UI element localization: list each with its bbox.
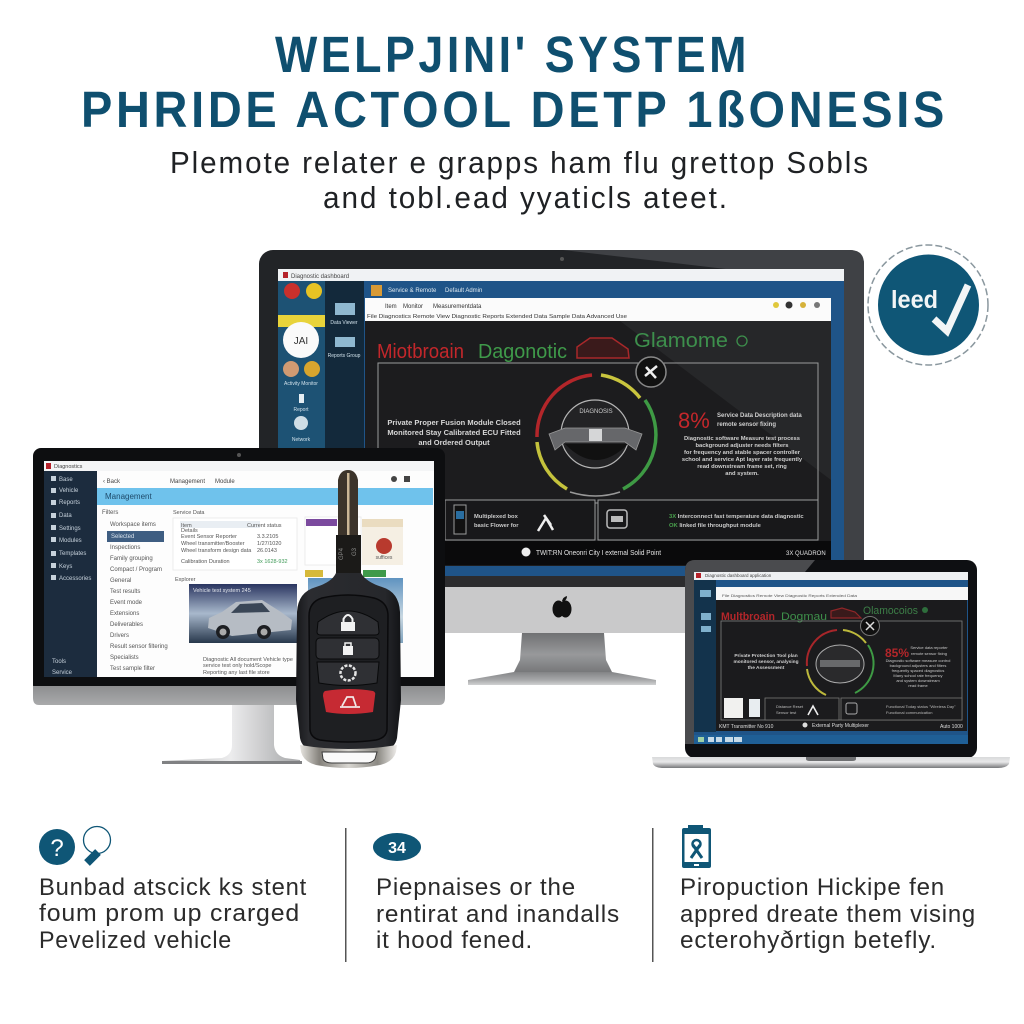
text block: Piropuction Hickipe fen bbox=[680, 874, 945, 901]
data table: Wheel transmitter/Booster bbox=[181, 541, 245, 547]
navigation sidebar: Modules bbox=[59, 538, 82, 544]
icon: question circle bbox=[39, 829, 75, 865]
data table: 26.0143 bbox=[257, 548, 277, 554]
data table: Calibration Duration bbox=[181, 559, 230, 565]
stat 8%: background adjuster needs filters bbox=[695, 443, 789, 449]
article text: Diagnostic All document Vehicle type bbox=[203, 657, 293, 663]
left note: Monitored Stay Calibrated ECU Fitted bbox=[387, 428, 521, 437]
laptop stat: frequently spaced diagnostics bbox=[892, 668, 944, 673]
list panel bbox=[102, 510, 168, 672]
button: unlock bbox=[316, 638, 379, 659]
text block: it hood fened. bbox=[376, 927, 533, 954]
list panel: Drivers bbox=[110, 633, 129, 639]
left note: Private Proper Fusion Module Closed bbox=[387, 418, 521, 427]
laptop sub panels: Functional communication bbox=[886, 710, 932, 715]
laptop stat: remote sensor fixing bbox=[911, 651, 947, 656]
divider bbox=[345, 828, 346, 962]
navigation sidebar: Settings bbox=[59, 526, 81, 532]
text block: foum prom up crarged bbox=[39, 900, 300, 927]
laptop sub panels: Functional Today status "Wireless Day" bbox=[886, 704, 956, 709]
divider bbox=[652, 828, 654, 962]
monitor body bbox=[33, 448, 445, 705]
list panel: Extensions bbox=[110, 611, 139, 617]
text block bbox=[680, 874, 976, 954]
button: panic bbox=[323, 689, 375, 714]
large monitor bbox=[259, 250, 864, 685]
status strip: 3X QUADRON bbox=[786, 551, 826, 557]
product cards bbox=[305, 517, 403, 643]
text block bbox=[39, 874, 307, 954]
navigation sidebar: Tools bbox=[52, 659, 66, 665]
data table: Service Data bbox=[173, 510, 205, 516]
stat 8%: Diagnostic software Measure test process bbox=[684, 436, 800, 442]
laptop stat: and system downstream bbox=[896, 678, 940, 683]
vehicle photo: Explorer bbox=[175, 577, 196, 583]
dark dashboard panel: Glamome bbox=[634, 330, 728, 352]
article text bbox=[203, 657, 293, 676]
engine illustration bbox=[549, 400, 642, 468]
monitor screen bbox=[44, 461, 434, 677]
list panel: Specialists bbox=[110, 655, 139, 661]
list panel: Workspace items bbox=[110, 522, 156, 528]
list panel: Selected bbox=[111, 534, 134, 540]
monitor stand bbox=[162, 704, 302, 764]
sub panels: 3X Interconnect fast temperature data diagnostic bbox=[669, 514, 804, 520]
list panel: Test results bbox=[110, 589, 140, 595]
icon: apple logo bbox=[552, 596, 572, 618]
laptop bbox=[652, 560, 1010, 768]
sub panels: OK linked file throughput module bbox=[669, 523, 762, 529]
sidebar icons: Network bbox=[292, 437, 311, 443]
list panel: Test sample filter bbox=[110, 666, 155, 672]
text block: Pevelized vehicle bbox=[39, 927, 232, 954]
subtitle: and tobl.ead yyaticls ateet. bbox=[323, 180, 729, 215]
toolbar bbox=[103, 476, 410, 485]
toolbar: ‹ Back bbox=[103, 479, 121, 485]
toolbar: Monitor bbox=[403, 304, 423, 310]
data table: Current status bbox=[247, 523, 282, 529]
monitor stand bbox=[468, 633, 656, 685]
laptop stat: Many school rate frequency bbox=[893, 673, 943, 678]
sidebar icons: JAI bbox=[294, 336, 308, 347]
feature column 2 bbox=[373, 833, 620, 954]
article text: Reporting any last file store bbox=[203, 670, 270, 676]
laptop stat bbox=[885, 645, 950, 688]
sidebar icons bbox=[278, 283, 361, 443]
vehicle photo: Vehicle test system 245 bbox=[193, 588, 251, 594]
laptop stat: Service data reporter bbox=[910, 645, 948, 650]
sub panels: Multiplexed box bbox=[474, 514, 519, 520]
feature column 3 bbox=[680, 825, 976, 954]
monitor screen: Diagnostics bbox=[54, 464, 83, 470]
top tabs: Default Admin bbox=[445, 288, 482, 294]
data table: 3.3.2105 bbox=[257, 534, 278, 540]
navigation sidebar: Accessories bbox=[59, 576, 91, 582]
navigation sidebar: Data bbox=[59, 513, 72, 519]
laptop status strip: External Party Multiplexer bbox=[812, 723, 869, 729]
small desktop monitor bbox=[33, 448, 445, 764]
badge: leed check bbox=[868, 245, 988, 365]
icon: key tag bbox=[84, 826, 110, 863]
data table: Wheel transform design data bbox=[181, 548, 252, 554]
laptop sub panels: Distance Reset bbox=[776, 704, 804, 709]
top tabs: Service & Remote bbox=[388, 288, 437, 294]
laptop sub panels bbox=[724, 698, 962, 720]
fob metal tip bbox=[300, 745, 397, 768]
sidebar icons: Activity Monitor bbox=[284, 381, 318, 387]
key blade bbox=[336, 470, 361, 575]
laptop screen: Multbroain bbox=[721, 611, 775, 623]
stat 8%: read downstream frame set, ring bbox=[697, 464, 787, 470]
toolbar: Module bbox=[215, 479, 235, 485]
feature column 1 bbox=[39, 826, 307, 954]
button: lock bbox=[317, 611, 379, 635]
laptop lid bbox=[685, 560, 977, 758]
navigation sidebar bbox=[44, 471, 97, 677]
icon: number badge bbox=[373, 833, 421, 861]
text block: ecterohyðrtign betefly. bbox=[680, 927, 937, 954]
navigation sidebar: Service bbox=[52, 670, 73, 676]
title bbox=[81, 26, 948, 138]
laptop stat: 85% bbox=[885, 646, 909, 660]
icon: phone ribbon bbox=[682, 825, 711, 868]
data table: Event Sensor Reporter bbox=[181, 534, 237, 540]
dark dashboard panel: Miotbroain bbox=[377, 341, 464, 363]
key blade: GP4 bbox=[339, 547, 345, 560]
laptop screen: File Diagnostics Remote View Diagnostic Reports Extended Data bbox=[722, 593, 858, 598]
laptop status strip bbox=[719, 722, 963, 730]
icon: question circle: ? bbox=[50, 835, 64, 862]
laptop screen: Diagnostic dashboard application bbox=[705, 573, 772, 578]
laptop base bbox=[652, 757, 1010, 768]
text block: rentirat and inandalls bbox=[376, 901, 620, 928]
toolbar bbox=[365, 298, 831, 321]
laptop stat: Diagnostic software measure control bbox=[886, 658, 950, 663]
status strip bbox=[522, 548, 826, 557]
dark dashboard panel bbox=[365, 321, 831, 566]
subtitle: Plemote relater e grapps ham flu grettop Sobls bbox=[170, 145, 870, 180]
navigation sidebar: Vehicle bbox=[59, 488, 79, 494]
fob body bbox=[296, 573, 401, 753]
left note bbox=[387, 418, 521, 447]
laptop stat: background adjusters and filters bbox=[890, 663, 946, 668]
sub panels: basic Flower for bbox=[474, 523, 519, 529]
list panel: Inspections bbox=[110, 545, 140, 551]
data table bbox=[173, 510, 297, 570]
fob inner rim bbox=[309, 595, 388, 742]
article text: service test only hold/Scope bbox=[203, 663, 271, 669]
title: PHRIDE ACTOOL DETP 1ßONESIS bbox=[81, 81, 948, 138]
toolbar: Management bbox=[170, 479, 205, 485]
laptop status strip: KMT Transmitter No 910 bbox=[719, 724, 774, 730]
sidebar icons: Data Viewer bbox=[330, 320, 358, 326]
laptop note: Private Protection Tool plan bbox=[734, 653, 798, 659]
list panel: Result sensor filtering bbox=[110, 644, 168, 650]
stat 8%: for frequency and stable spacer controller bbox=[684, 450, 801, 456]
navigation sidebar: Keys bbox=[59, 564, 72, 570]
laptop note bbox=[733, 653, 799, 671]
text block: Piepnaises or the bbox=[376, 874, 576, 901]
title: WELPJINI' SYSTEM bbox=[275, 26, 750, 83]
sidebar icons: Report bbox=[293, 407, 309, 413]
toolbar: File Diagnostics Remote View Diagnostic Reports Extended Data Sample Data Advanced Use bbox=[367, 314, 627, 320]
icon: number badge: 34 bbox=[388, 840, 406, 857]
status strip: TWIT:RN Oneonri City I external Solid Point bbox=[536, 550, 661, 557]
car key fob bbox=[296, 470, 401, 768]
gauge ring bbox=[537, 357, 666, 496]
data table: 3x 1628-932 bbox=[257, 559, 288, 565]
badge: leed check: leed bbox=[891, 286, 938, 314]
laptop sub panels: Sensor test bbox=[776, 710, 797, 715]
stat 8%: 8% bbox=[678, 408, 710, 433]
laptop status strip: Auto 1000 bbox=[940, 724, 963, 730]
laptop note: monitored sensor, analysing bbox=[733, 659, 799, 665]
laptop screen: Olamocoios bbox=[863, 605, 918, 617]
laptop screen bbox=[694, 572, 968, 744]
stat 8% bbox=[678, 408, 803, 477]
dark dashboard panel: Dagonotic bbox=[478, 341, 567, 363]
button: trunk bbox=[317, 662, 379, 686]
text block bbox=[376, 874, 620, 954]
top tabs bbox=[371, 285, 482, 296]
product cards: suffices bbox=[376, 555, 393, 561]
laptop screen: Dogmau bbox=[781, 611, 827, 623]
vehicle photo bbox=[175, 577, 297, 643]
stat 8%: remote sensor fixing bbox=[717, 422, 776, 428]
stat 8%: school and service Apt layer rate frequently bbox=[682, 457, 803, 463]
stat 8%: and system. bbox=[725, 471, 759, 477]
list panel: Compact / Program bbox=[110, 567, 162, 573]
laptop note: the Assessment bbox=[748, 665, 785, 671]
subtitle bbox=[170, 145, 870, 215]
laptop taskbar bbox=[694, 735, 968, 744]
text block: Bunbad atscick ks stent bbox=[39, 874, 307, 901]
navigation sidebar: Reports bbox=[59, 500, 80, 506]
stat 8%: Service Data Description data bbox=[717, 413, 802, 419]
blue header: Management bbox=[105, 492, 152, 501]
laptop gauge bbox=[807, 616, 880, 695]
monitor screen: Diagnostic dashboard bbox=[291, 274, 349, 280]
list panel: Deliverables bbox=[110, 622, 143, 628]
data table: Details bbox=[181, 528, 198, 534]
blue header bbox=[97, 488, 433, 505]
navigation sidebar: Templates bbox=[59, 551, 86, 557]
navigation sidebar: Base bbox=[59, 477, 73, 483]
sub panels bbox=[445, 500, 818, 540]
key blade: G3 bbox=[352, 547, 358, 556]
monitor screen bbox=[278, 269, 844, 576]
list panel: Event mode bbox=[110, 600, 143, 606]
left note: and Ordered Output bbox=[418, 438, 490, 447]
text block: appred dreate them vising bbox=[680, 901, 976, 928]
monitor body bbox=[259, 250, 864, 633]
laptop stat: read frame bbox=[908, 683, 928, 688]
data table: Item bbox=[181, 523, 192, 529]
toolbar: Measurementdata bbox=[433, 304, 482, 310]
engine illustration: DIAGNOSIS bbox=[579, 409, 613, 415]
list panel: Filters bbox=[102, 510, 118, 516]
sidebar icons: Reports Group bbox=[328, 353, 361, 359]
toolbar: Item bbox=[385, 304, 397, 310]
list panel: Family grouping bbox=[110, 556, 153, 562]
data table: 1/27/1020 bbox=[257, 541, 281, 547]
list panel: General bbox=[110, 578, 131, 584]
